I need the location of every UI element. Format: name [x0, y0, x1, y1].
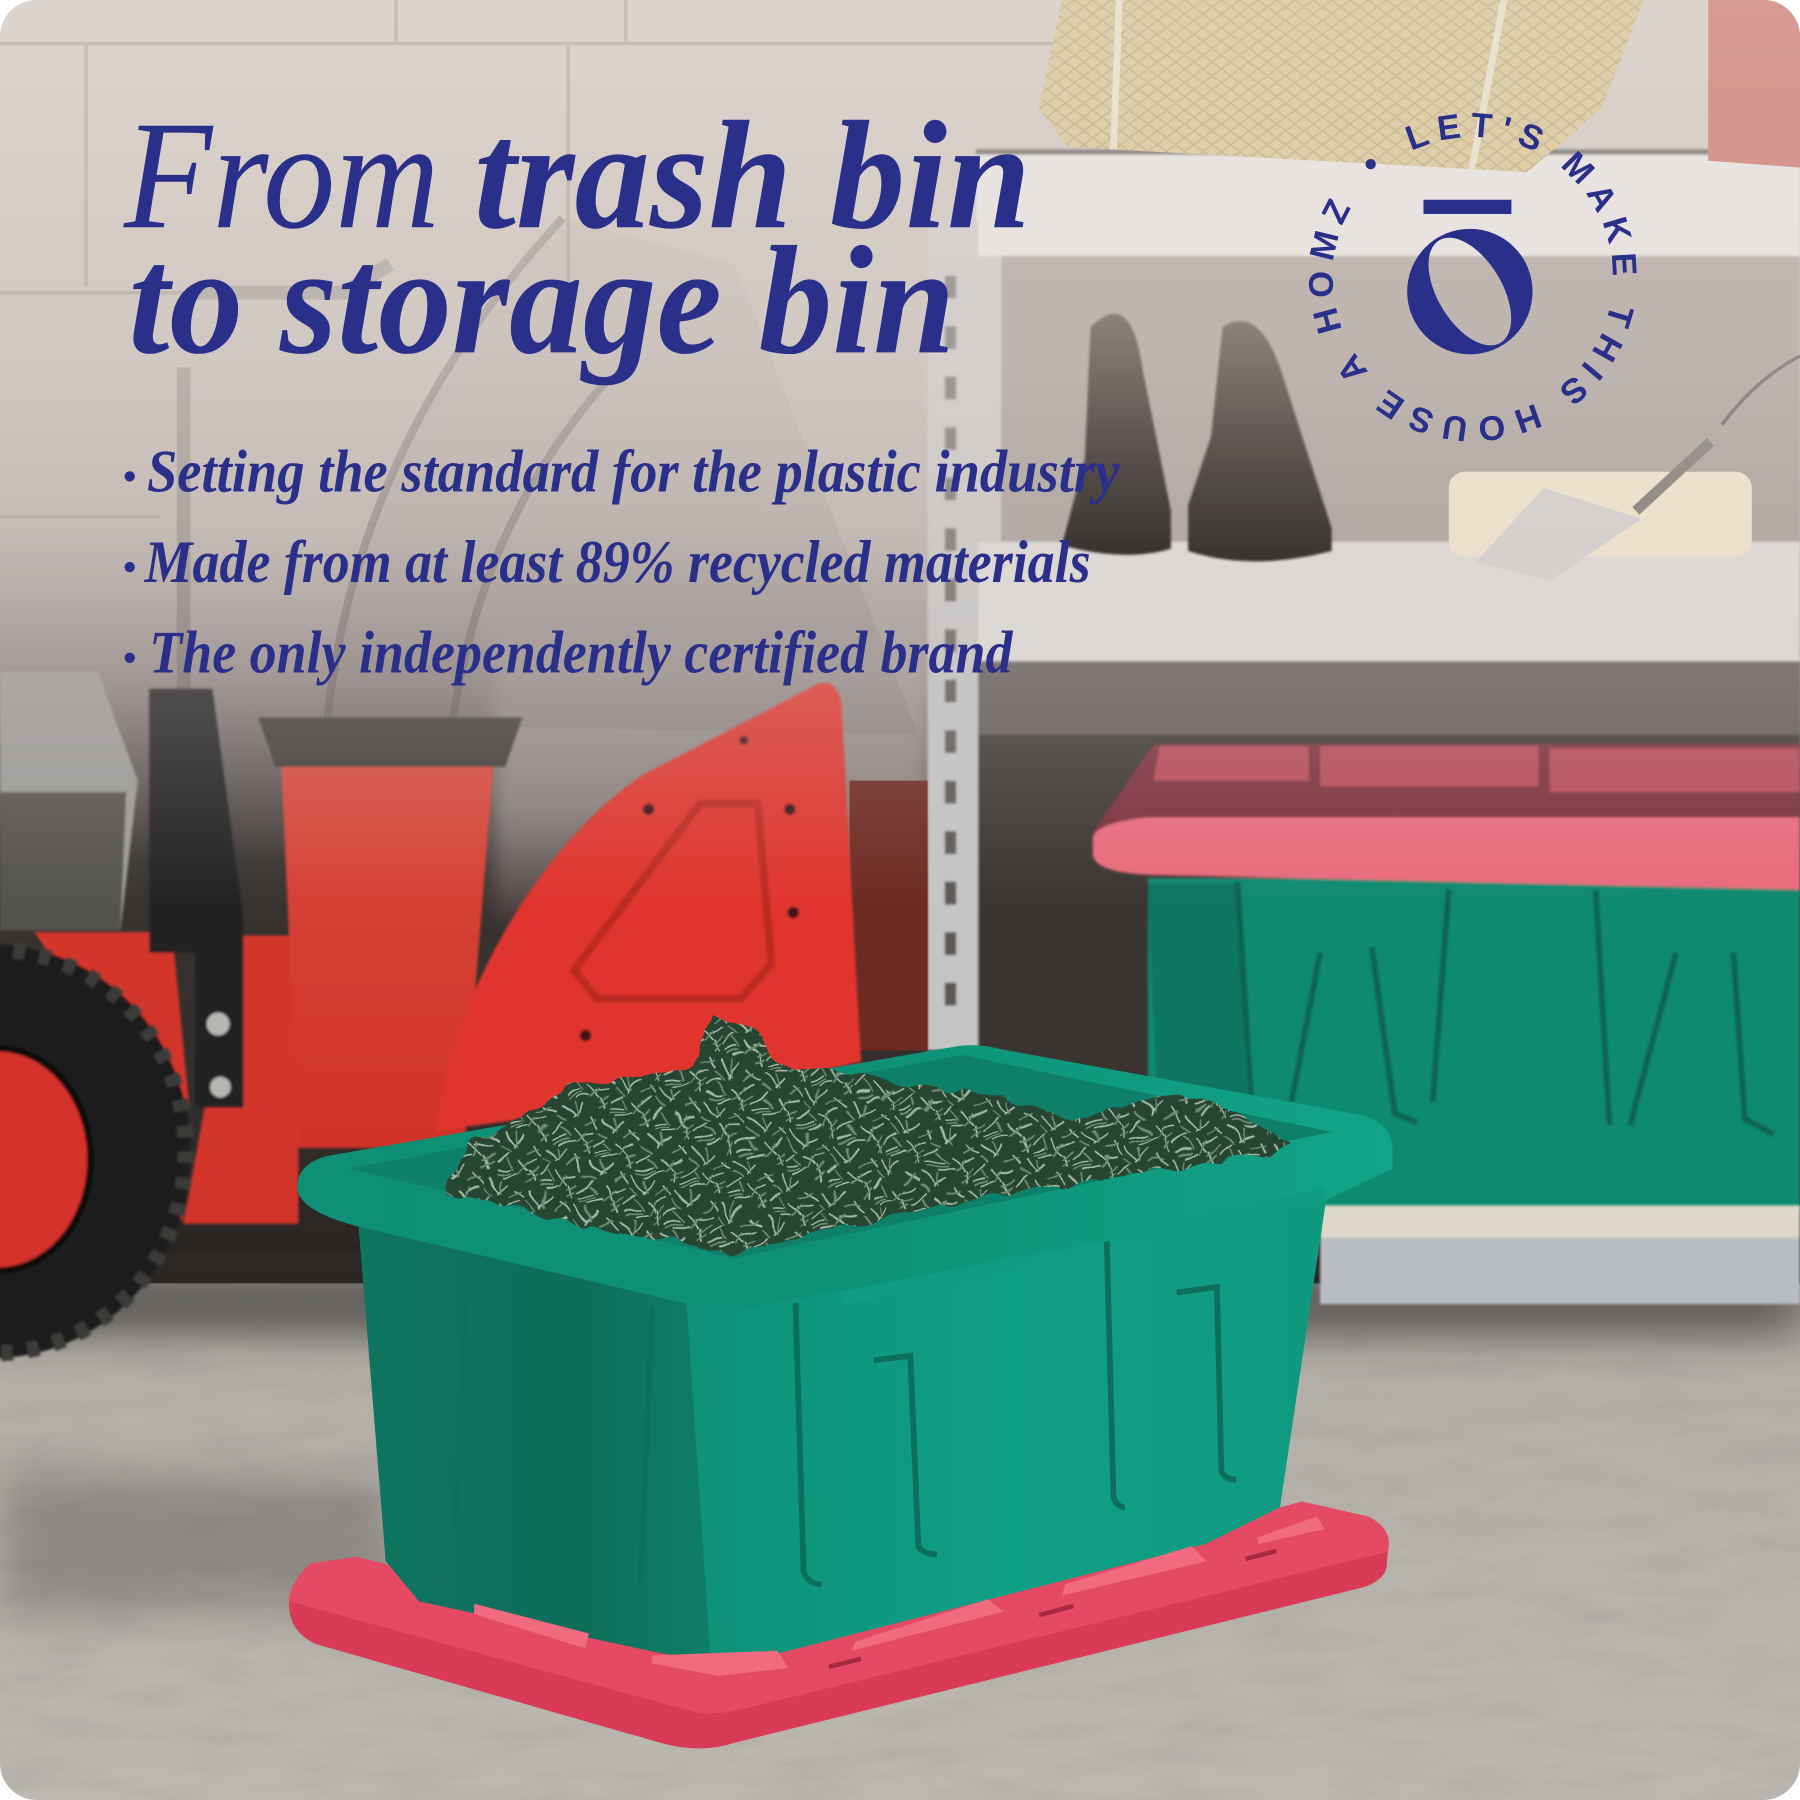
- garage wall: [0, 0, 1800, 1309]
- bolts: [207, 1012, 231, 1097]
- red box on the shelf: [1708, 0, 1800, 168]
- rim tabs: [840, 1188, 1325, 1304]
- rubber boots: [1062, 314, 1332, 561]
- wheel: [0, 945, 191, 1358]
- bin interior: [349, 1055, 1332, 1258]
- chute collar: [258, 717, 522, 767]
- curved red fin: [436, 683, 861, 1131]
- frame: [149, 689, 243, 1108]
- lid slots: [829, 1551, 1277, 1667]
- title: trash bin: [474, 89, 1031, 261]
- benefit bullets: Setting the standard for the plastic industry: [147, 438, 1120, 505]
- red chassis: [34, 932, 298, 1224]
- benefit bullets: Made from at least 89% recycled materials: [144, 529, 1091, 596]
- benefit bullets: The only independently certified brand: [149, 620, 1014, 687]
- rim: [297, 1045, 1392, 1308]
- logo macron: [1423, 200, 1511, 214]
- main storage bin with lid: [289, 1019, 1392, 1748]
- circular brand badge: LET'S MAKE THIS HOUSE A HOMZ: [1308, 112, 1637, 442]
- dark lower wall: [0, 1194, 928, 1332]
- lower shelf edge: [1320, 1205, 1800, 1304]
- snowblower: [0, 672, 861, 1358]
- fog overlay: [0, 0, 1800, 907]
- grey snowblower chute housing: [184, 218, 918, 735]
- concrete floor: [0, 1280, 1800, 1800]
- chute: [281, 763, 494, 1148]
- background storage bin: [1093, 744, 1800, 1213]
- title: [123, 89, 1031, 386]
- engine: [0, 672, 138, 930]
- benefit bullets: [125, 438, 1120, 687]
- pine garland: [450, 1019, 1283, 1249]
- pink lid: [289, 1502, 1389, 1748]
- title: to storage bin: [129, 214, 955, 386]
- lid bumps: [474, 1516, 1325, 1676]
- light face: [686, 1194, 1327, 1665]
- shelving unit: [926, 148, 1800, 1074]
- title: From: [123, 89, 440, 261]
- net bag on the shelf: [1039, 0, 1644, 172]
- side ribs: [648, 1240, 1236, 1587]
- dark face: [358, 1221, 717, 1662]
- paint roller and brush: [1449, 356, 1800, 581]
- logo ring: [1407, 229, 1533, 354]
